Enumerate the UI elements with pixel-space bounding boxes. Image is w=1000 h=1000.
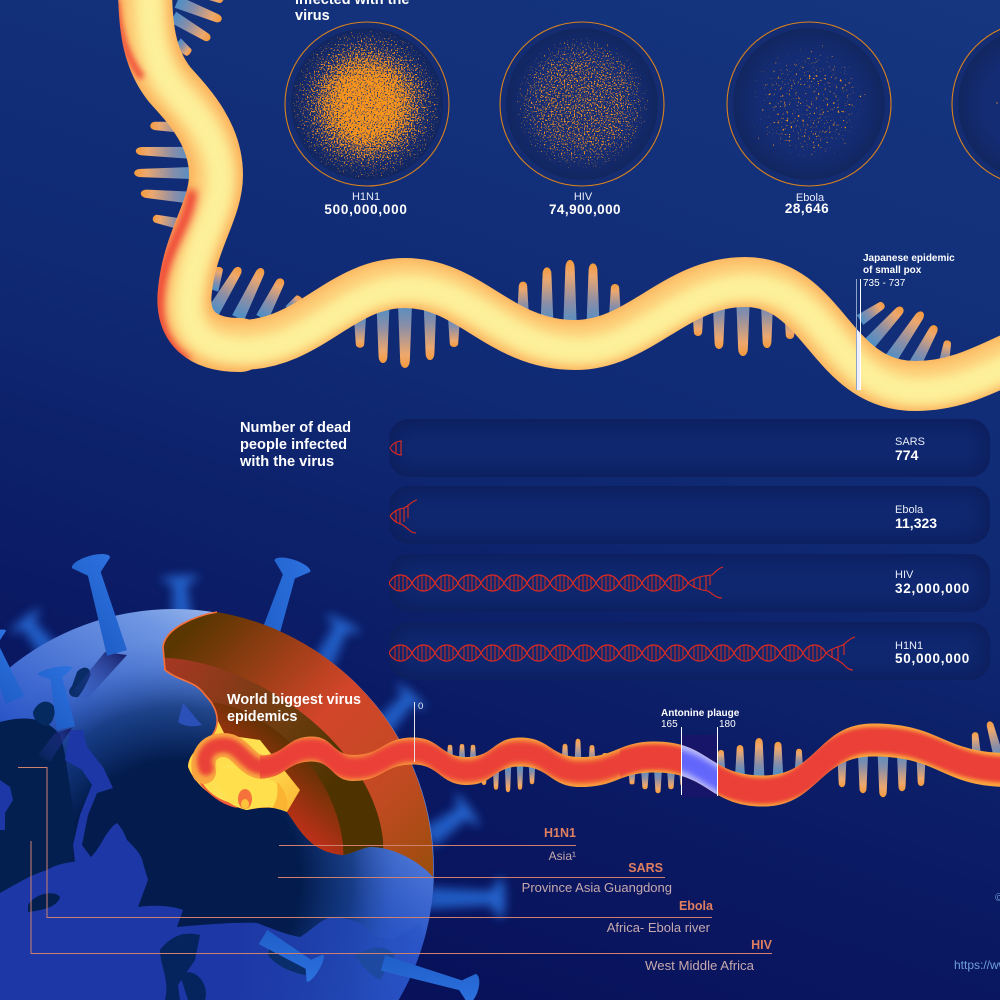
bar: Ebola: 11,323 (895, 515, 937, 531)
upper helix ribbon (116, 0, 1000, 391)
dot circle: Ebola (727, 22, 891, 216)
callout: H1N1 location (279, 826, 576, 863)
sharp virus spikes behind globe (247, 554, 312, 656)
marker: Japanese epidemic of small pox: of small pox (863, 265, 922, 276)
blurred background virus spikes (8, 575, 505, 919)
rods: lower helix base pairs (447, 720, 1000, 797)
bar: SARS: 774 (895, 447, 919, 463)
heading: number of dead people: with the virus (239, 454, 334, 470)
bar: H1N1: H1N1 (895, 640, 923, 652)
bar: HIV: 32,000,000 (895, 581, 970, 596)
marker: Japanese epidemic of small pox: Japanese epidemic (863, 253, 955, 264)
bar: SARS: SARS (895, 436, 925, 448)
spike shadows on globe (68, 652, 127, 698)
callout: HIV location (31, 841, 773, 973)
callout: Ebola location (18, 768, 714, 935)
callout: H1N1 location: Asia¹ (549, 849, 576, 863)
marker: Antonine plauge: 165 (661, 719, 678, 730)
marker: Japanese epidemic of small pox (856, 253, 955, 390)
bar: Ebola: Ebola (895, 504, 924, 516)
marker: Antonine plauge: Antonine plauge (661, 708, 740, 719)
marker: Antonine plauge: 180 (719, 719, 736, 730)
callout: SARS location: SARS (628, 861, 663, 875)
heading: world biggest virus epidemics (227, 692, 361, 725)
dot circle: H1N1: H1N1 (352, 191, 380, 203)
virus coil inside crater (192, 745, 288, 812)
bar: HIV (389, 567, 970, 598)
globe (0, 600, 440, 1000)
bar: H1N1: 50,000,000 (895, 651, 970, 666)
marker: Japanese epidemic of small pox: 735 - 737 (863, 278, 906, 289)
rods: upper helix base pairs (134, 0, 953, 371)
bar: Ebola (390, 500, 937, 533)
callout: Ebola location: Africa- Ebola river (607, 920, 711, 935)
bar: H1N1 (389, 637, 970, 670)
bar: HIV: HIV (895, 569, 914, 581)
bar: SARS (390, 436, 925, 463)
dark band behind Antonine plague (682, 735, 718, 797)
crater cross-section (164, 612, 434, 877)
dot circle: Ebola: Ebola (796, 192, 825, 204)
marker: Antonine plauge (661, 708, 740, 796)
heading: number of dead people: Number of dead (240, 420, 351, 436)
callout: H1N1 location: H1N1 (544, 826, 576, 840)
dot circle: Ebola: 28,646 (785, 201, 829, 216)
heading: world biggest virus epidemics: World biggest virus (227, 692, 361, 708)
crater rim (163, 612, 217, 738)
dot circle: HIV: 74,900,000 (549, 202, 621, 217)
dot circle: SARS (cropped) (952, 22, 1000, 186)
marker: year 0 (414, 701, 423, 762)
globe shading and continents (0, 658, 421, 1000)
dot circle: HIV (500, 22, 664, 217)
marker: year 0: 0 (418, 701, 423, 712)
callout: HIV location: West Middle Africa (645, 958, 755, 973)
heading: infected with the virus (295, 0, 409, 24)
callout: SARS location: Province Asia Guangdong (522, 880, 672, 895)
lower helix ribbon (250, 720, 1000, 810)
callout: Ebola location: Ebola (679, 899, 714, 913)
heading: number of dead people (239, 420, 351, 470)
dot circle: H1N1: 500,000,000 (324, 202, 408, 217)
callout: SARS location (278, 861, 672, 895)
panel: death count bars (389, 419, 990, 680)
heading: world biggest virus epidemics: epidemics (227, 709, 297, 725)
callout: HIV location: HIV (751, 938, 773, 952)
heading: number of dead people: people infected (240, 437, 347, 453)
sharp virus spikes on globe (0, 550, 482, 1000)
dot circle: H1N1 (285, 22, 449, 217)
dot circle: HIV: HIV (574, 191, 593, 203)
heading: infected with the virus: virus (295, 8, 330, 24)
